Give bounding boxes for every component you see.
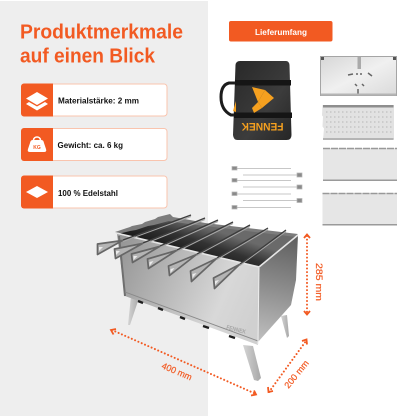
back wall with notched rim (115, 214, 298, 267)
icon: layers (26, 92, 48, 110)
back right leg (281, 315, 289, 338)
grill (98, 214, 298, 381)
icon: kg weight: KG (33, 145, 41, 151)
title: auf einen Blick (20, 44, 156, 68)
bottom slots (138, 301, 235, 338)
steel plate 3 (323, 148, 397, 181)
heading: Lieferumfang: Lieferumfang (255, 28, 307, 37)
feature card: Materialstärke (21, 84, 167, 116)
dimension arrow: 200 mm: 200 mm (282, 358, 311, 390)
feature card: Gewicht (21, 128, 167, 161)
left side strip (119, 236, 125, 296)
front bottom rim (125, 292, 258, 341)
front right leg (243, 345, 261, 381)
dimension arrow: 200 mm (268, 340, 311, 392)
skewers set (232, 166, 302, 209)
icon: sheet (26, 186, 48, 198)
feature card: Materialstärke: Materialstärke: 2 mm (58, 96, 139, 106)
steel plate 2 perforated (322, 105, 394, 140)
skewer handle holes (99, 247, 219, 285)
front panel (117, 234, 259, 345)
right side panel (258, 235, 298, 342)
skewers (98, 215, 286, 288)
steel plate 1 (320, 56, 396, 96)
feature card: Edelstahl: 100 % Edelstahl (58, 189, 118, 198)
steel plate 4 (322, 193, 397, 226)
title (20, 20, 183, 68)
left grey background panel (0, 1, 208, 416)
skewer handles (98, 240, 240, 288)
icon: kg weight (28, 137, 46, 152)
inner firebox (118, 221, 296, 266)
front left leg (128, 296, 139, 325)
dimension arrow: 400 mm: 400 mm (160, 361, 194, 382)
dimension arrow: 285 mm (304, 234, 324, 314)
feature card: Edelstahl (21, 176, 167, 208)
dimension arrow: 400 mm (111, 329, 256, 396)
rim highlight (116, 233, 298, 267)
bag brand text: FENNEK (241, 120, 284, 132)
bag logo (233, 87, 274, 113)
dimension arrow: 285 mm: 285 mm (314, 263, 324, 301)
heading: Lieferumfang (229, 21, 332, 42)
feature card: Gewicht: Gewicht: ca. 6 kg (58, 141, 123, 150)
title: Produktmerkmale (20, 20, 183, 44)
bag handle (221, 83, 239, 115)
corner edge (258, 268, 259, 344)
brand mark: FENNEK (226, 325, 247, 336)
carrying bag (221, 61, 292, 140)
